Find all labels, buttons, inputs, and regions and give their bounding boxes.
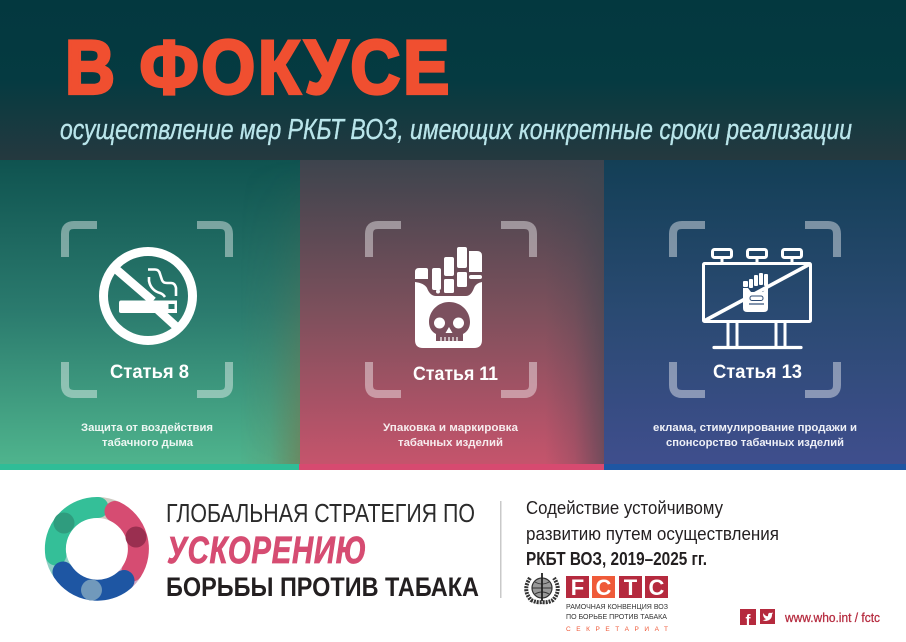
strategy description xyxy=(526,498,779,569)
strategy heading: БОРЬБЫ ПРОТИВ ТАБАКА xyxy=(166,572,479,602)
label: article 13: Статья 13 xyxy=(713,362,802,383)
icon: facebook xyxy=(740,609,756,629)
title: В ФОКУСЕ xyxy=(65,26,452,110)
strategy description: развитию путем осуществления xyxy=(526,524,779,544)
FCTC logo: F xyxy=(571,575,584,600)
FCTC logo xyxy=(566,575,668,633)
icon: no smoking xyxy=(104,252,192,340)
panel: article 13 xyxy=(604,160,906,470)
website: www.who.int / fctc xyxy=(784,611,880,625)
panel: article 11 xyxy=(299,160,604,470)
icon: WHO emblem xyxy=(526,573,558,602)
strategy description: Содействие устойчивому xyxy=(526,498,723,518)
caption: article 8: табачного дыма xyxy=(102,437,194,449)
FCTC logo: C xyxy=(649,575,665,600)
FCTC logo: РАМОЧНАЯ КОНВЕНЦИЯ ВОЗ xyxy=(566,604,668,611)
icon: facebook: f xyxy=(746,612,752,629)
corner brackets xyxy=(673,225,837,394)
caption: article 13: еклама, стимулирование продажи и xyxy=(653,422,857,434)
FCTC logo: T xyxy=(624,575,638,600)
FCTC logo: ПО БОРЬБЕ ПРОТИВ ТАБАКА xyxy=(566,614,667,621)
strategy heading xyxy=(166,498,479,602)
corner brackets xyxy=(369,225,533,394)
caption: article 8: Защита от воздействия xyxy=(81,422,213,434)
icon: twitter xyxy=(760,609,775,624)
caption: article 11: табачных изделий xyxy=(398,437,503,449)
header band xyxy=(0,0,906,160)
caption: article 11: Упаковка и маркировка xyxy=(383,422,519,434)
caption: article 8 xyxy=(81,422,213,449)
icon: cigarette pack with skull xyxy=(415,247,482,348)
corner brackets xyxy=(65,225,229,394)
label: article 11: Статья 11 xyxy=(413,364,498,385)
FCTC logo: СЕКРЕТАРИАТ xyxy=(566,626,668,633)
icon: crossed billboard xyxy=(704,250,810,348)
panel: article 8 xyxy=(0,160,300,470)
caption: article 13: спонсорство табачных изделий xyxy=(666,437,844,449)
acceleration ring logo xyxy=(54,507,146,600)
label: article 8: Статья 8 xyxy=(110,362,189,383)
strategy heading: УСКОРЕНИЮ xyxy=(167,530,367,572)
FCTC logo: C xyxy=(596,575,612,600)
caption: article 13 xyxy=(653,422,857,449)
caption: article 11 xyxy=(383,422,519,449)
strategy heading: ГЛОБАЛЬНАЯ СТРАТЕГИЯ ПО xyxy=(166,498,475,528)
strategy description: РКБТ ВОЗ, 2019–2025 гг. xyxy=(526,549,707,569)
